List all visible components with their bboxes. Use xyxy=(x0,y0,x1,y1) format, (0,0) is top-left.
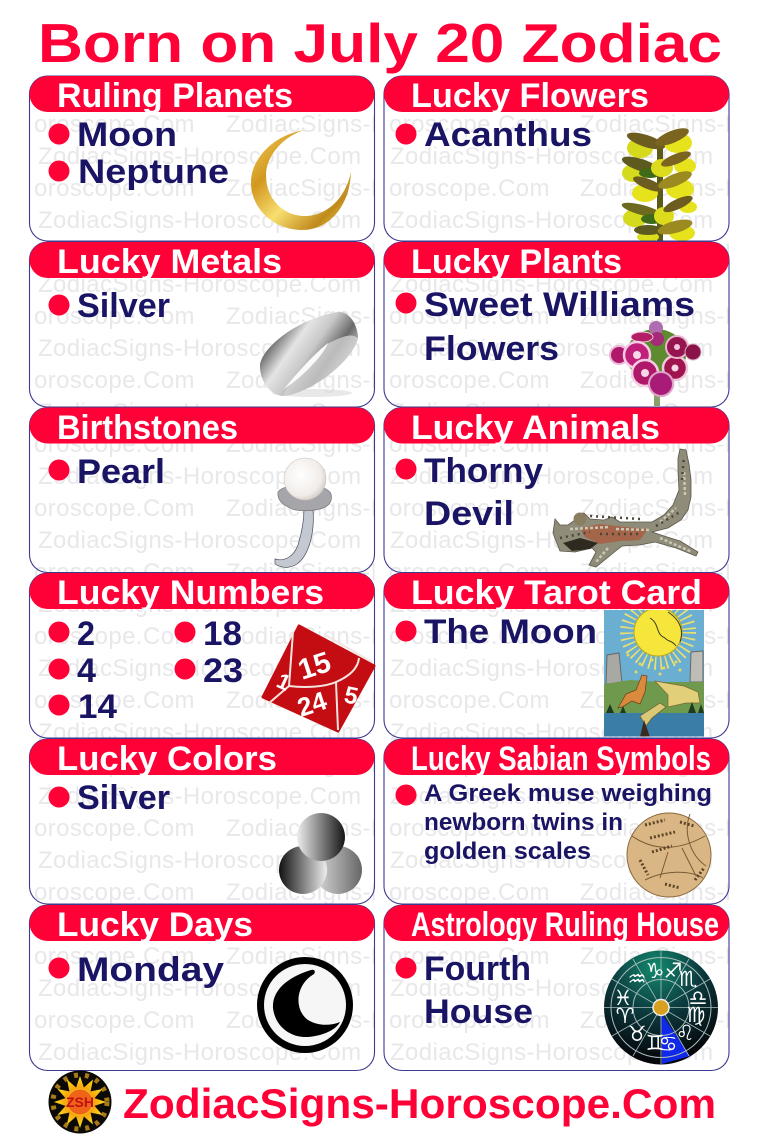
watermark: left column: ZodiacSigns-Horoscope.Com xyxy=(38,207,361,234)
watermark: left column: oroscope.Com xyxy=(34,559,195,586)
title: Born on July 20 Zodiac xyxy=(38,12,722,74)
watermark: right column: oroscope.Com xyxy=(389,495,550,522)
watermark: right column: oroscope.Com xyxy=(389,559,550,586)
panel: lucky days xyxy=(30,905,374,1070)
icon: zodiac house wheel: ♑ xyxy=(646,960,664,983)
panel: astrology ruling house xyxy=(384,905,729,1070)
watermark: right column: oroscope.Com xyxy=(389,303,550,330)
watermark: right column: ZodiacSigns-Horoscope.Com xyxy=(390,655,713,682)
watermark: left column: ZodiacSigns-Horoscope.Com xyxy=(226,1007,549,1034)
icon: zodiac house wheel: ♊ xyxy=(646,1032,664,1055)
watermark: left column: ZodiacSigns-Horoscope.Com xyxy=(38,847,361,874)
panel: lucky animals xyxy=(384,408,729,572)
heading: lucky animals: Lucky Animals xyxy=(411,409,660,447)
watermark: left column: ZodiacSigns-Horoscope.Com xyxy=(38,783,361,810)
panel: lucky plants xyxy=(384,242,729,407)
watermark: right column: ZodiacSigns-Horoscope.Com xyxy=(390,463,713,490)
watermark: left column: ZodiacSigns-Horoscope.Com xyxy=(38,975,361,1002)
watermark: left column: ZodiacSigns-Horoscope.Com xyxy=(38,399,361,426)
watermark: left column: ZodiacSigns-Horoscope.Com xyxy=(38,1039,361,1066)
icon: three silver spheres xyxy=(279,813,362,894)
watermark: left column: oroscope.Com xyxy=(34,815,195,842)
watermark: left column: oroscope.Com xyxy=(34,943,195,970)
icon: zodiac house wheel: ♐ xyxy=(664,960,682,983)
watermark: left column: oroscope.Com xyxy=(34,239,195,266)
icon: zodiac house wheel: ♓ xyxy=(614,987,632,1010)
watermark: left column: oroscope.Com xyxy=(34,495,195,522)
watermark: right column: oroscope.Com xyxy=(389,815,550,842)
watermark: right column: oroscope.Com xyxy=(389,687,550,714)
heading: lucky numbers: Lucky Numbers xyxy=(57,574,324,612)
watermark: right column: ZodiacSigns-Horoscope.Com xyxy=(390,783,713,810)
footer website name: ZodiacSigns-Horoscope.Com xyxy=(123,1080,716,1127)
watermark: left column: ZodiacSigns-Horoscope.Com xyxy=(38,271,361,298)
item: acanthus: Acanthus xyxy=(424,116,592,154)
panel: lucky sabian symbols xyxy=(384,739,729,904)
item: fourth house xyxy=(396,950,533,1031)
item: thorny devil: Devil xyxy=(424,495,514,533)
icon: red polyhedral die: 1 xyxy=(273,668,295,696)
watermark: right column: ZodiacSigns-Horoscope.Com xyxy=(390,591,713,618)
watermark: right column: oroscope.Com xyxy=(389,239,550,266)
item: thorny devil xyxy=(396,452,543,533)
watermark: right column: ZodiacSigns-Horoscope.Com xyxy=(390,207,713,234)
watermark: right column: ZodiacSigns-Horoscope.Com xyxy=(390,271,713,298)
watermark: right column: ZodiacSigns-Horoscope.Com xyxy=(390,399,713,426)
icon: zodiac house wheel: ♉ xyxy=(628,1023,646,1046)
panel: lucky colors xyxy=(30,739,374,904)
watermark: left column: oroscope.Com xyxy=(34,1007,195,1034)
watermark: left column: ZodiacSigns-Horoscope.Com xyxy=(38,143,361,170)
icon: sweet william flowers xyxy=(610,321,701,406)
watermark: right column: ZodiacSigns-Horoscope.Com xyxy=(390,911,713,938)
watermark: right column: oroscope.Com xyxy=(389,879,550,906)
icon: red polyhedral die xyxy=(263,626,374,731)
item: moon: Moon xyxy=(77,116,177,154)
watermark: left column: ZodiacSigns-Horoscope.Com xyxy=(38,719,361,746)
watermark: right column: ZodiacSigns-Horoscope.Com xyxy=(390,975,713,1002)
watermark: left column: ZodiacSigns-Horoscope.Com xyxy=(226,431,549,458)
item: sabian symbol text: newborn twins in xyxy=(424,809,623,836)
panel: lucky numbers xyxy=(30,573,374,738)
panel: lucky metals xyxy=(30,242,374,407)
watermark: right column: ZodiacSigns-Horoscope.Com xyxy=(390,847,713,874)
item: pearl: Pearl xyxy=(77,453,165,491)
item: thorny devil: Thorny xyxy=(424,452,543,490)
item: 18 xyxy=(174,615,242,653)
watermark: left column xyxy=(35,114,374,1065)
heading: ruling planets: Ruling Planets xyxy=(57,77,293,115)
icon: black crescent moon badge xyxy=(257,957,353,1053)
watermark: left column: ZodiacSigns-Horoscope.Com xyxy=(226,943,549,970)
icon: acanthus plant xyxy=(620,125,697,242)
icon: zodiac house wheel: ♏ xyxy=(679,968,698,991)
watermark: left column: oroscope.Com xyxy=(34,111,195,138)
watermark: left column: oroscope.Com xyxy=(34,175,195,202)
icon: thorny devil lizard xyxy=(553,449,698,567)
watermark: left column: oroscope.Com xyxy=(34,687,195,714)
item: silver: Silver xyxy=(77,287,170,325)
item: sweet williams flowers: Flowers xyxy=(424,330,559,368)
item: 23 xyxy=(174,652,243,690)
watermark: left column: ZodiacSigns-Horoscope.Com xyxy=(226,175,549,202)
footer logo: ZSH xyxy=(66,1094,94,1110)
watermark: left column: ZodiacSigns-Horoscope.Com xyxy=(38,591,361,618)
watermark: right column: ZodiacSigns-Horoscope.Com xyxy=(390,527,713,554)
panel: ruling planets xyxy=(30,76,374,241)
watermark: right column: oroscope.Com xyxy=(389,943,550,970)
panel: lucky tarot card xyxy=(384,573,729,738)
icon: zodiac house wheel: ♈ xyxy=(616,1005,634,1028)
heading: lucky metals: Lucky Metals xyxy=(57,243,282,281)
heading: lucky plants: Lucky Plants xyxy=(411,243,622,281)
icon: the moon tarot card xyxy=(604,601,704,737)
watermark: right column: ZodiacSigns-Horoscope.Com xyxy=(390,335,713,362)
icon: red polyhedral die: 24 xyxy=(294,685,331,723)
watermark: right column: ZodiacSigns-Horoscope.Com xyxy=(390,719,713,746)
watermark: left column: ZodiacSigns-Horoscope.Com xyxy=(226,815,549,842)
item: sabian symbol text xyxy=(396,780,712,865)
heading: lucky days: Lucky Days xyxy=(57,906,253,944)
item: 4 xyxy=(48,652,96,690)
item: fourth house: House xyxy=(424,993,533,1031)
watermark: right column: oroscope.Com xyxy=(389,111,550,138)
item: 14: 14 xyxy=(78,688,117,726)
item: 14 xyxy=(48,688,117,726)
watermark: right column: ZodiacSigns-Horoscope.Com xyxy=(390,1039,713,1066)
item: the moon: The Moon xyxy=(424,613,597,651)
icon: red polyhedral die: 15 xyxy=(294,646,335,687)
watermark: left column: ZodiacSigns-Horoscope.Com xyxy=(38,527,361,554)
watermark: left column: ZodiacSigns-Horoscope.Com xyxy=(38,463,361,490)
watermark: left column: oroscope.Com xyxy=(34,367,195,394)
watermark: left column: ZodiacSigns-Horoscope.Com xyxy=(226,623,549,650)
icon: red polyhedral die: 5 xyxy=(342,681,360,711)
item: 23: 23 xyxy=(203,652,243,690)
watermark: right column xyxy=(389,111,758,1066)
watermark: right column: oroscope.Com xyxy=(389,431,550,458)
item: 2 xyxy=(48,615,95,653)
watermark: left column: ZodiacSigns-Horoscope.Com xyxy=(226,367,549,394)
watermark: left column: oroscope.Com xyxy=(34,431,195,458)
icon: silver ring xyxy=(260,312,358,397)
icon: zodiac house wheel: ♌ xyxy=(676,1022,694,1045)
watermark: left column: ZodiacSigns-Horoscope.Com xyxy=(226,879,549,906)
panel: birthstones xyxy=(30,408,374,572)
watermark: left column: ZodiacSigns-Horoscope.Com xyxy=(226,559,549,586)
item: fourth house: Fourth xyxy=(424,950,531,988)
icon: sabian chart disc xyxy=(627,813,711,897)
icon: pearl ring xyxy=(275,458,331,567)
icon: zodiac house wheel: ♋ xyxy=(659,1033,677,1056)
item: sweet williams flowers xyxy=(396,286,695,368)
item: monday: Monday xyxy=(77,951,224,989)
watermark: left column: oroscope.Com xyxy=(34,623,195,650)
watermark: left column: ZodiacSigns-Horoscope.Com xyxy=(38,911,361,938)
item: sweet williams flowers: Sweet Williams xyxy=(424,286,695,324)
watermark: left column: ZodiacSigns-Horoscope.Com xyxy=(226,303,549,330)
watermark: right column: ZodiacSigns-Horoscope.Com xyxy=(390,143,713,170)
icon: zodiac house wheel: ♎ xyxy=(689,987,707,1010)
watermark: right column: oroscope.Com xyxy=(389,751,550,778)
heading: birthstones: Birthstones xyxy=(57,409,238,447)
watermark: left column: ZodiacSigns-Horoscope.Com xyxy=(226,495,549,522)
panel: lucky flowers xyxy=(384,76,729,242)
icon: zodiac house wheel: ♍ xyxy=(687,1004,705,1027)
icon: zodiac house wheel: ♒ xyxy=(628,968,646,991)
item: 2: 2 xyxy=(77,615,95,653)
heading: lucky colors: Lucky Colors xyxy=(57,740,277,778)
watermark: right column: oroscope.Com xyxy=(389,623,550,650)
item: sabian symbol text: A Greek muse weighing xyxy=(424,780,712,807)
watermark: left column: oroscope.Com xyxy=(34,879,195,906)
item: 18: 18 xyxy=(203,615,242,653)
watermark: right column: oroscope.Com xyxy=(389,367,550,394)
heading: lucky flowers: Lucky Flowers xyxy=(411,77,649,115)
footer logo xyxy=(48,1070,112,1134)
watermark: left column: ZodiacSigns-Horoscope.Com xyxy=(38,655,361,682)
icon: gold crescent moon xyxy=(251,130,351,230)
item: sabian symbol text: golden scales xyxy=(424,838,591,865)
watermark: left column: ZodiacSigns-Horoscope.Com xyxy=(38,335,361,362)
watermark: left column: ZodiacSigns-Horoscope.Com xyxy=(226,239,549,266)
heading: lucky tarot card: Lucky Tarot Card xyxy=(411,574,702,612)
item: neptune: Neptune xyxy=(78,153,229,191)
icon: zodiac house wheel xyxy=(604,950,718,1064)
watermark: left column: ZodiacSigns-Horoscope.Com xyxy=(226,687,549,714)
watermark: left column: ZodiacSigns-Horoscope.Com xyxy=(226,751,549,778)
watermark: left column: oroscope.Com xyxy=(34,303,195,330)
watermark: left column: oroscope.Com xyxy=(34,751,195,778)
item: silver: Silver xyxy=(77,779,170,817)
watermark: right column: oroscope.Com xyxy=(389,1007,550,1034)
watermark: left column: ZodiacSigns-Horoscope.Com xyxy=(226,111,549,138)
item: 4: 4 xyxy=(77,652,96,690)
watermark: right column: oroscope.Com xyxy=(389,175,550,202)
